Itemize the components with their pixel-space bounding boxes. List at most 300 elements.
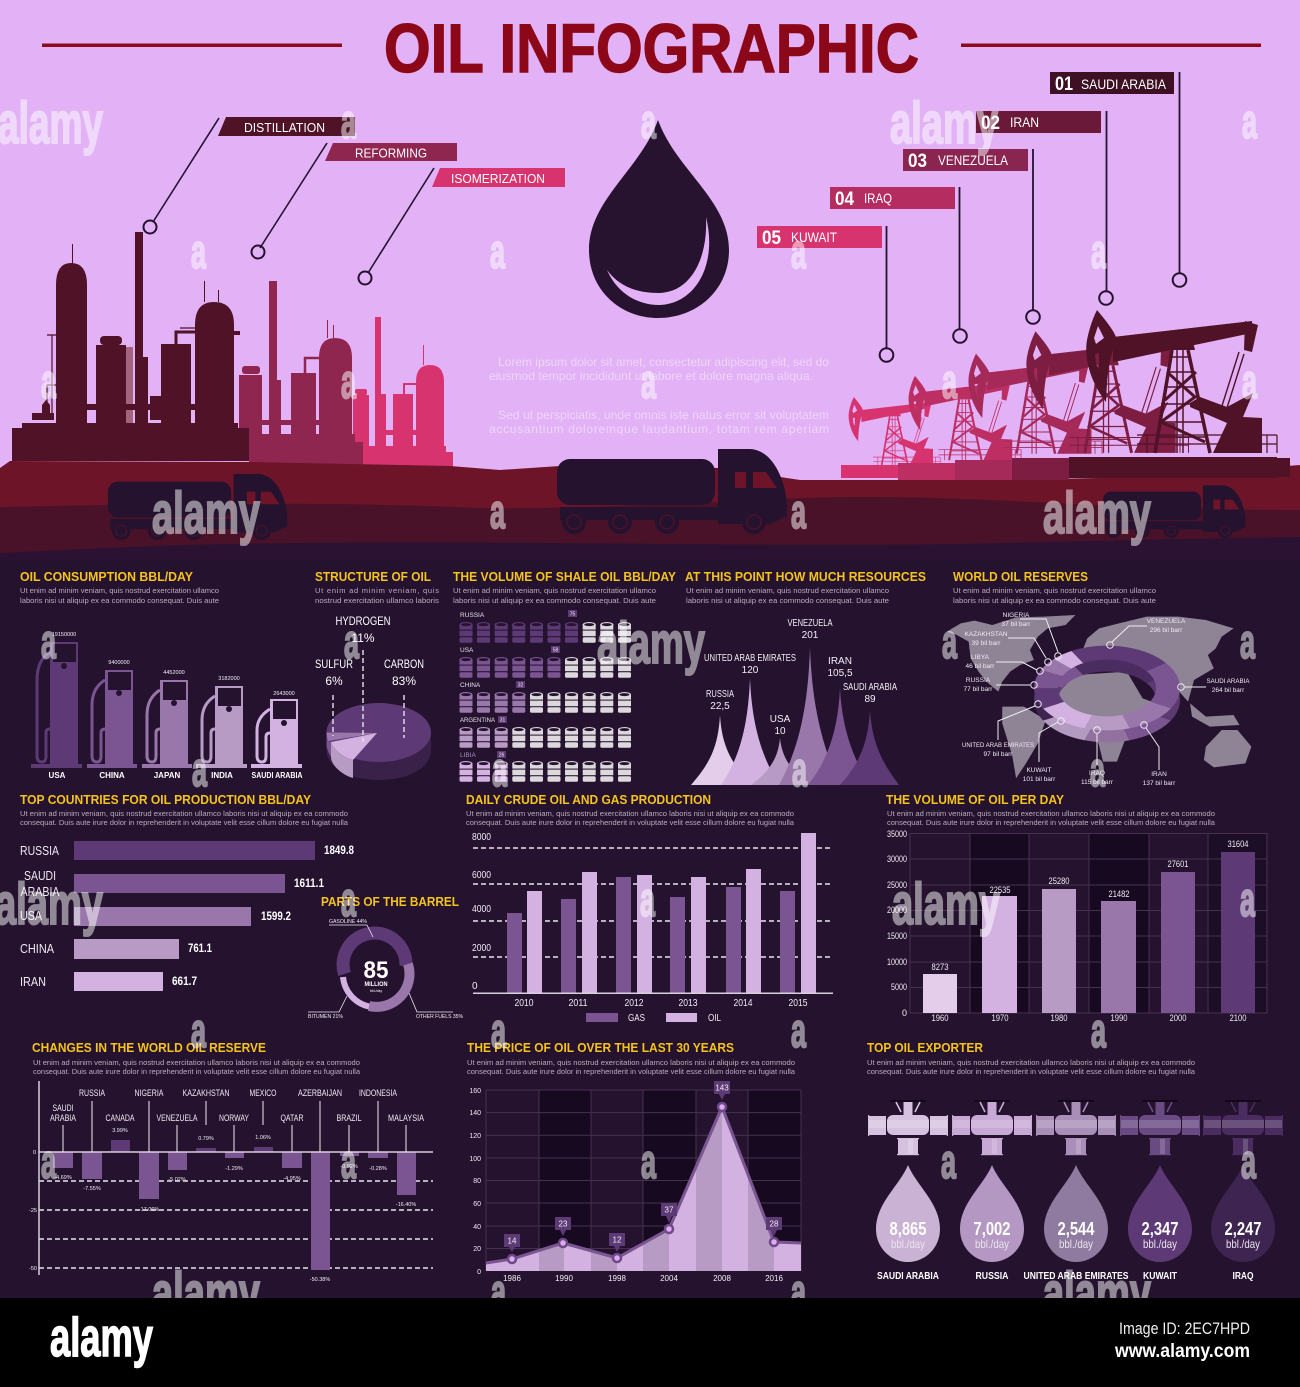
panel: world oil reserves: 137 bil barr (1143, 780, 1176, 787)
stock watermarks: a (491, 1266, 506, 1319)
stock watermarks: a (341, 874, 356, 927)
footer url: www.alamy.com (1114, 1341, 1250, 1362)
panel: resources peak chart: 22,5 (710, 701, 730, 712)
stock watermarks: alamy (1043, 1261, 1151, 1326)
country label 01: SAUDI ARABIA (1081, 76, 1167, 92)
panel: daily crude oil and gas production: 2000 (472, 943, 491, 954)
panel: changes in the world oil reserve: QATAR (280, 1113, 304, 1123)
intro text block: accusantium doloremque laudantium, totam rem aperiam (489, 422, 829, 436)
panel: volume of oil per day: consequat. Duis aute irure dolor in reprehenderit in voluptate velit esse cillum dolore eu fugiat nulla (887, 818, 1216, 827)
panel: volume of oil per day: 0 (902, 1008, 907, 1018)
country label 03: 03 (908, 151, 927, 172)
panel: top oil exporter: RUSSIA (976, 1271, 1008, 1282)
panel: top oil exporter: bbl./day (975, 1237, 1009, 1251)
panel: world oil reserves: laboris nisi ut aliquip ex ea commodo consequat. Duis aute (953, 596, 1156, 605)
panel: top oil exporter (867, 1040, 1283, 1282)
panel: volume of oil per day: THE VOLUME OF OIL PER DAY (886, 792, 1064, 807)
panel: volume of oil per day: 1960 (932, 1013, 948, 1023)
panel: volume of oil per day: 10000 (887, 957, 907, 967)
stock watermarks: a (791, 1005, 806, 1058)
panel: top oil exporter: 2,247 (1224, 1219, 1262, 1239)
intro text block: Lorem ipsum dolor sit amet, consectetur adipiscing elit, sed do (498, 355, 829, 369)
panel: world oil reserves: IRAN (1151, 771, 1167, 778)
panel: resources peak chart: Ut enim ad minim veniam, quis nostrud exercitation ullamco (686, 586, 889, 595)
stock watermarks: a (492, 744, 507, 797)
panel: top oil exporter: 2,544 (1058, 1219, 1094, 1239)
panel: price of oil line chart: 60 (473, 1201, 481, 1208)
panel: daily crude oil and gas production: 2014 (734, 998, 753, 1009)
panel: daily crude oil and gas production: 8000 (472, 832, 491, 843)
footer image id: Image ID: 2EC7HPD (1119, 1319, 1250, 1338)
panel: shale oil volume: 31 (500, 718, 505, 724)
panel: oil consumption: INDIA (211, 771, 233, 780)
panel: volume of oil per day: 25280 (1048, 876, 1070, 886)
panel: top production countries: 761.1 (188, 941, 212, 955)
panel: price of oil line chart: 0 (477, 1269, 481, 1276)
process label: distillation (144, 117, 355, 234)
panel: oil consumption: 9400000 (108, 660, 130, 666)
panel: volume of oil per day: 30000 (887, 854, 907, 864)
panel: top production countries: TOP COUNTRIES FOR OIL PRODUCTION BBL/DAY (20, 792, 311, 807)
panel: changes in the world oil reserve: KAZAKHSTAN (182, 1088, 230, 1098)
panel: changes in the world oil reserve: CHANGES IN THE WORLD OIL RESERVE (32, 1040, 266, 1055)
panel: daily crude oil and gas production: DAILY CRUDE OIL AND GAS PRODUCTION (466, 792, 711, 807)
panel: price of oil line chart: 2008 (713, 1274, 731, 1283)
pump jacks (849, 310, 1277, 466)
panel: oil consumption: Ut enim ad minim veniam, quis nostrud exercitation ullamco (20, 586, 219, 595)
panel: changes in the world oil reserve: -5.02% (168, 1177, 186, 1183)
panel: daily crude oil and gas production: 0 (472, 981, 478, 992)
ground hills (0, 461, 1300, 560)
country label 05: KUWAIT (791, 229, 837, 245)
country label 02: 02 (981, 113, 1000, 134)
country label 01 (1050, 72, 1186, 287)
panel: shale oil volume: 58 (553, 648, 558, 654)
panel: shale oil volume: RUSSIA (460, 612, 485, 619)
panel: volume of oil per day: 20000 (887, 905, 907, 915)
panel: oil consumption (20, 569, 303, 780)
panel: resources peak chart: IRAN (828, 656, 852, 667)
panel: volume of oil per day: 1970 (992, 1013, 1008, 1023)
panel: daily crude oil and gas production: 2012 (624, 998, 644, 1009)
panel: world oil reserves: VENEZUELA (1147, 618, 1186, 625)
process label: isomerization (358, 168, 565, 284)
stock watermarks: a (490, 226, 505, 279)
stock watermarks: a (942, 356, 957, 409)
panel: volume of oil per day (886, 792, 1267, 1023)
panel: resources peak chart: VENEZUELA (788, 618, 833, 629)
stock watermarks: a (1090, 744, 1105, 797)
panel: volume of oil per day: 1980 (1050, 1013, 1068, 1023)
stock watermarks: a (791, 486, 806, 539)
panel: price of oil line chart: 1986 (503, 1274, 521, 1283)
stock watermarks: a (41, 616, 56, 669)
panel: world oil reserves: KAZAKHSTAN (965, 631, 1008, 638)
panel: price of oil line chart: 28 (770, 1220, 779, 1228)
footer band (0, 1298, 1300, 1387)
panel: world oil reserves: UNITED ARAB EMIRATES (962, 742, 1035, 749)
panel: oil consumption: 19150000 (52, 632, 76, 638)
stock watermarks: a (1241, 1136, 1256, 1189)
panel: top production countries: RUSSIA (20, 843, 59, 858)
panel: structure of oil: HYDROGEN (336, 614, 390, 628)
panel: top production countries: 1599.2 (261, 909, 291, 923)
panel: world oil reserves: 115 bil barr (1081, 779, 1114, 786)
panel: daily crude oil and gas production: GAS (628, 1013, 645, 1024)
panel: parts of the barrel: MILLION (364, 981, 388, 988)
panel: top production countries: CHINA (20, 941, 54, 956)
panel: changes in the world oil reserve: Ut enim ad minim veniam, quis nostrud exercitation ullamco laboris nisi ut aliquip ex ea commodo (33, 1058, 360, 1067)
panel: daily crude oil and gas production: 2013 (678, 998, 698, 1009)
panel: top oil exporter: IRAQ (1232, 1271, 1254, 1282)
panel: changes in the world oil reserve: 0 (33, 1150, 36, 1156)
panel: price of oil line chart: Ut enim ad minim veniam, quis nostrud exercitation ullamco laboris nisi ut aliquip ex ea commodo (467, 1058, 795, 1067)
panel: top oil exporter: bbl./day (891, 1237, 925, 1251)
panel: world oil reserves: 296 bil barr (1150, 627, 1183, 634)
country label 04: 04 (835, 189, 854, 210)
panel: volume of oil per day: 8273 (932, 962, 948, 972)
sky background (0, 0, 1300, 560)
stock watermarks: alamy (152, 481, 260, 546)
panel: structure of oil: nostrud exercitation ullamco laboris (315, 596, 439, 605)
panel: top oil exporter: SAUDI ARABIA (877, 1271, 939, 1282)
panel: volume of oil per day: 22535 (990, 885, 1010, 895)
panel: volume of oil per day: 27601 (1168, 859, 1188, 869)
country label 04: IRAQ (864, 190, 892, 206)
stock watermarks: a (491, 1005, 506, 1058)
stock watermarks: a (41, 1136, 56, 1189)
panel: parts of the barrel (308, 894, 463, 1020)
panel: price of oil line chart: 1998 (608, 1274, 626, 1283)
dark panel background (0, 560, 1300, 1298)
stock watermarks: a (341, 1136, 356, 1189)
panel: world oil reserves: IRAQ (1089, 770, 1105, 777)
panel: oil consumption: 4452000 (163, 670, 185, 676)
panel: price of oil line chart: 100 (469, 1156, 481, 1163)
panel: changes in the world oil reserve: 0.79% (198, 1136, 214, 1142)
panel: changes in the world oil reserve (29, 1040, 433, 1283)
stock watermarks: a (490, 486, 505, 539)
panel: price of oil line chart: 160 (469, 1088, 481, 1095)
panel: shale oil volume: CHINA (460, 682, 481, 689)
stock watermarks: alamy (0, 91, 103, 156)
panel: world oil reserves: 77 bil barr (964, 686, 993, 693)
stock watermarks: a (641, 1136, 656, 1189)
panel: top oil exporter: bbl./day (1143, 1237, 1177, 1251)
panel: structure of oil: 11% (351, 631, 375, 645)
process label: reforming: REFORMING (355, 146, 427, 160)
stock watermarks: a (1240, 616, 1255, 669)
panel: price of oil line chart: 2016 (765, 1274, 783, 1283)
tanker truck: centre (557, 449, 787, 534)
panel: oil consumption: 2643000 (273, 691, 295, 697)
panel: top oil exporter: 8,865 (890, 1219, 926, 1239)
panel: changes in the world oil reserve: -16.40% (396, 1202, 416, 1208)
panel: volume of oil per day: 25000 (887, 880, 907, 890)
panel: daily crude oil and gas production: OIL (708, 1013, 721, 1024)
panel: changes in the world oil reserve: NORWAY (219, 1113, 249, 1123)
panel: world oil reserves: 97 bil barr (984, 751, 1013, 758)
panel: top oil exporter: consequat. Duis aute irure dolor in reprehenderit in voluptate velit esse cillum dolore eu fugiat nulla (867, 1067, 1196, 1076)
panel: top production countries: 661.7 (172, 974, 197, 988)
panel: changes in the world oil reserve: -0.92% (340, 1164, 358, 1170)
panel: top oil exporter: 2,347 (1142, 1219, 1178, 1239)
panel: changes in the world oil reserve: 1.06% (255, 1135, 271, 1141)
panel: changes in the world oil reserve: BRAZIL (336, 1113, 362, 1123)
country label 05 (757, 226, 893, 362)
title: OIL INFOGRAPHIC (384, 10, 919, 87)
panel: parts of the barrel: BITUMEN 21% (308, 1014, 343, 1020)
panel: changes in the world oil reserve: -1.29% (225, 1166, 243, 1172)
panel: changes in the world oil reserve: CANADA (106, 1113, 134, 1123)
panel: daily crude oil and gas production: 6000 (472, 870, 491, 881)
panel: price of oil line chart: 143 (715, 1084, 729, 1092)
country label 02 (976, 111, 1113, 305)
stock watermarks: a (1091, 1005, 1106, 1058)
panel: resources peak chart: 10 (774, 726, 786, 737)
panel: structure of oil: STRUCTURE OF OIL (315, 569, 431, 584)
panel: resources peak chart: 105,5 (827, 668, 853, 679)
intro text block (489, 355, 829, 436)
panel: world oil reserves: KUWAIT (1026, 767, 1052, 774)
panel: world oil reserves: 264 bil barr (1212, 687, 1245, 694)
panel: price of oil line chart: 1990 (555, 1274, 573, 1283)
panel: price of oil line chart: THE PRICE OF OIL OVER THE LAST 30 YEARS (467, 1040, 734, 1055)
panel: changes in the world oil reserve: RUSSIA (79, 1088, 105, 1098)
panel: parts of the barrel: GASOLINE 44% (329, 919, 367, 925)
panel: daily crude oil and gas production: 4000 (472, 904, 491, 915)
stock watermarks: alamy (1043, 481, 1151, 546)
panel: changes in the world oil reserve: NIGERIA (134, 1088, 164, 1098)
panel: world oil reserves: NIGERIA (1003, 612, 1030, 619)
panel: changes in the world oil reserve: consequat. Duis aute irure dolor in reprehenderit in voluptate velit esse cillum dolore eu fugiat nulla (33, 1067, 361, 1076)
title (42, 10, 1261, 87)
panel: shale oil volume: USA (460, 647, 474, 654)
panel: volume of oil per day: 5000 (891, 982, 907, 992)
panel: daily crude oil and gas production: consequat. Duis aute irure dolor in reprehenderit in voluptate velit esse cillum dolore eu fugiat nulla (466, 818, 795, 827)
panel: changes in the world oil reserve: VENEZUELA (156, 1113, 198, 1123)
panel: structure of oil: Ut enim ad minim veniam, quis (315, 586, 439, 595)
stock watermarks: alamy (892, 872, 1000, 937)
stock watermarks: a (791, 1266, 806, 1319)
panel: changes in the world oil reserve: MALAYSIA (388, 1113, 424, 1123)
panel: volume of oil per day: 35000 (887, 829, 907, 839)
panel: changes in the world oil reserve: SAUDI (52, 1103, 74, 1113)
panel: oil consumption: 3182000 (218, 676, 240, 682)
stock watermarks: alamy (597, 611, 705, 676)
panel: top production countries (20, 792, 354, 991)
panel: changes in the world oil reserve: -17.06% (139, 1207, 159, 1213)
stock watermarks: a (791, 226, 806, 279)
panel: oil consumption: USA (49, 771, 66, 780)
panel: changes in the world oil reserve: 3.99% (112, 1128, 128, 1134)
panel: price of oil line chart: 20 (473, 1246, 481, 1253)
panel: top production countries: IRAN (20, 974, 46, 989)
stock watermarks: a (640, 874, 655, 927)
stock watermarks: a (191, 226, 206, 279)
panel: price of oil line chart: 14 (508, 1236, 517, 1246)
panel: parts of the barrel: OTHER FUELS 35% (416, 1014, 463, 1020)
panel: daily crude oil and gas production: 2010 (514, 998, 534, 1009)
panel: oil consumption: JAPAN (154, 771, 180, 780)
panel: top oil exporter: bbl./day (1226, 1237, 1260, 1251)
panel: structure of oil: 6% (325, 674, 343, 688)
panel: price of oil line chart: 37 (665, 1206, 674, 1214)
panel: top oil exporter: UNITED ARAB EMIRATES (1024, 1271, 1129, 1282)
panel: shale oil volume: THE VOLUME OF SHALE OIL BBL/DAY (453, 569, 676, 584)
country label 05: 05 (762, 228, 781, 249)
panel: resources peak chart: laboris nisi ut aliquip ex ea commodo consequat. Duis aute (686, 596, 889, 605)
panel: world oil reserves: LIBYA (971, 654, 990, 661)
panel: resources peak chart: 89 (864, 694, 876, 705)
refinery silhouette: pink (353, 317, 453, 468)
country label 03 (903, 149, 1040, 324)
panel: changes in the world oil reserve: ARABIA (50, 1113, 76, 1123)
refinery silhouette: dark (12, 232, 249, 461)
panel: resources peak chart: USA (770, 714, 791, 725)
panel: daily crude oil and gas production: 2015 (788, 998, 808, 1009)
panel: top oil exporter: KUWAIT (1143, 1271, 1177, 1282)
panel: parts of the barrel: 85 (364, 957, 388, 984)
panel: world oil reserves: WORLD OIL RESERVES (953, 569, 1088, 584)
panel: price of oil line chart: consequat. Duis aute irure dolor in reprehenderit in voluptate velit esse cillum dolore eu fugiat nulla (467, 1067, 796, 1076)
panel: top oil exporter: bbl./day (1059, 1237, 1093, 1251)
panel: shale oil volume: 26 (499, 752, 504, 758)
panel: price of oil line chart (467, 1040, 801, 1283)
panel: structure of oil: SULFUR (315, 657, 353, 671)
panel: resources peak chart: 120 (742, 665, 759, 676)
stock watermarks: a (942, 616, 957, 669)
panel: shale oil volume: ARGENTINA (460, 717, 496, 724)
panel: changes in the world oil reserve: -0.28% (369, 1166, 387, 1172)
panel: shale oil volume: 32 (518, 682, 523, 688)
panel: shale oil volume (453, 569, 676, 782)
panel: price of oil line chart: 140 (469, 1110, 481, 1117)
stock watermarks: a (641, 96, 656, 149)
panel: volume of oil per day: 21482 (1108, 889, 1130, 899)
panel: changes in the world oil reserve: -4.69% (54, 1175, 72, 1181)
panel: world oil reserves: RUSSIA (966, 677, 991, 684)
stock watermarks: a (1242, 96, 1257, 149)
stock watermarks: a (341, 96, 356, 149)
panel: changes in the world oil reserve: -25 (29, 1208, 37, 1214)
panel: daily crude oil and gas production: 2011 (568, 998, 588, 1009)
panel: top production countries: 1849.8 (324, 843, 354, 857)
panel: top production countries: 1611.1 (294, 876, 324, 890)
stock watermarks: a (792, 744, 807, 797)
stock watermarks: a (191, 1005, 206, 1058)
panel: top production countries: Ut enim ad minim veniam, quis nostrud exercitation ullamco laboris nisi ut aliquip ex ea commodo (20, 809, 348, 818)
stock watermarks: alamy (152, 1261, 260, 1326)
stock watermarks: alamy (890, 91, 998, 156)
panel: changes in the world oil reserve: AZERBAIJAN (298, 1088, 342, 1098)
panel: oil consumption: OIL CONSUMPTION BBL/DAY (20, 569, 193, 584)
stock watermarks: a (1091, 226, 1106, 279)
panel: price of oil line chart: 2004 (660, 1274, 678, 1283)
panel: world oil reserves: SAUDI ARABIA (1206, 678, 1250, 685)
stock watermarks: a (1240, 874, 1255, 927)
panel: price of oil line chart: 23 (559, 1220, 568, 1228)
stock watermarks: a (641, 356, 656, 409)
panel: price of oil line chart: 120 (469, 1133, 481, 1140)
panel: volume of oil per day: 2000 (1170, 1013, 1186, 1023)
panel: oil consumption: SAUDI ARABIA (252, 771, 303, 780)
panel: structure of oil: 83% (392, 674, 416, 688)
panel: world oil reserves: 39 bil barr (972, 640, 1001, 647)
panel: shale oil volume: LIBIA (460, 752, 477, 759)
panel: top production countries: ARABIA (20, 884, 60, 899)
panel: volume of oil per day: Ut enim ad minim veniam, quis nostrud exercitation ullamco laboris nisi ut aliquip ex ea commodo (887, 809, 1215, 818)
panel: resources peak chart: AT THIS POINT HOW MUCH RESOURCES (685, 569, 926, 584)
stock watermarks: a (341, 356, 356, 409)
panel: daily crude oil and gas production: Ut enim ad minim veniam, quis nostrud exercitation ullamco laboris nisi ut aliquip ex ea commodo (466, 809, 794, 818)
panel: shale oil volume: Ut enim ad minim veniam, quis nostrud exercitation ullamco (453, 586, 656, 595)
tanker truck: left (108, 474, 287, 540)
tanker truck: right (1103, 485, 1246, 538)
panel: top production countries: consequat. Duis aute irure dolor in reprehenderit in voluptate velit esse cillum dolore eu fugiat nulla (20, 818, 349, 827)
panel: parts of the barrel: bbl./day (370, 989, 382, 993)
intro text block: Sed ut perspiciatis, unde omnis iste natus error sit voluptatem (498, 408, 829, 422)
panel: world oil reserves: 37 bil barr (1002, 621, 1031, 628)
process label: isomerization: ISOMERIZATION (451, 171, 545, 186)
panel: top oil exporter: TOP OIL EXPORTER (867, 1040, 984, 1055)
panel: changes in the world oil reserve: -7.55% (83, 1186, 101, 1192)
process label: distillation: DISTILLATION (244, 120, 325, 135)
country label 02: IRAN (1010, 114, 1039, 130)
panel: changes in the world oil reserve: -50.38% (310, 1277, 330, 1283)
panel: resources peak chart: RUSSIA (706, 689, 734, 700)
stock watermarks: a (344, 616, 359, 669)
panel: volume of oil per day: 2100 (1230, 1013, 1246, 1023)
panel: top production countries: SAUDI (24, 868, 56, 883)
panel: resources peak chart: SAUDI ARABIA (843, 682, 897, 693)
panel: resources peak chart: 201 (802, 630, 819, 641)
panel: world oil reserves: 101 bil barr (1023, 776, 1056, 783)
panel: shale oil volume: 75 (570, 612, 575, 618)
panel: parts of the barrel: PARTS OF THE BARREL (321, 894, 459, 909)
panel: top oil exporter: Ut enim ad minim veniam, quis nostrud exercitation ullamco laboris nisi ut aliquip ex ea commodo (867, 1058, 1195, 1067)
panel: oil consumption: CHINA (99, 771, 125, 780)
panel: top oil exporter: 7,002 (974, 1219, 1010, 1239)
process label: reforming (252, 143, 457, 258)
panel: changes in the world oil reserve: -50 (29, 1266, 37, 1272)
panel: resources peak chart: UNITED ARAB EMIRATES (704, 653, 796, 664)
stock watermarks: a (192, 744, 207, 797)
panel: price of oil line chart: 12 (613, 1236, 622, 1244)
panel: changes in the world oil reserve: -4.95% (283, 1176, 301, 1182)
country label 04 (830, 187, 967, 343)
stock watermarks: a (1242, 356, 1257, 409)
panel: volume of oil per day: 1990 (1110, 1013, 1128, 1023)
panel: shale oil volume: laboris nisi ut aliquip ex ea commodo consequat. Duis aute (453, 596, 656, 605)
intro text block: eiusmod tempor incididunt ut labore et dolore magna aliqua. (489, 369, 813, 383)
panel: price of oil line chart: 80 (473, 1178, 481, 1185)
panel: price of oil line chart: 40 (473, 1224, 481, 1231)
panel: volume of oil per day: 15000 (887, 931, 907, 941)
panel: daily crude oil and gas production (466, 792, 833, 1024)
panel: structure of oil (315, 569, 439, 780)
stock watermarks: a (941, 1136, 956, 1189)
pump jack platforms (841, 457, 1290, 480)
refinery silhouette: magenta (239, 281, 363, 466)
panel: structure of oil: CARBON (384, 657, 424, 671)
panel: top production countries: USA (20, 908, 42, 923)
panel: changes in the world oil reserve: INDONESIA (359, 1088, 397, 1098)
panel: resources peak chart (685, 569, 926, 785)
panel: volume of oil per day: 31604 (1228, 839, 1248, 849)
panel: world oil reserves: Ut enim ad minim veniam, quis nostrud exercitation ullamco (953, 586, 1156, 595)
country label 03: VENEZUELA (938, 152, 1009, 168)
